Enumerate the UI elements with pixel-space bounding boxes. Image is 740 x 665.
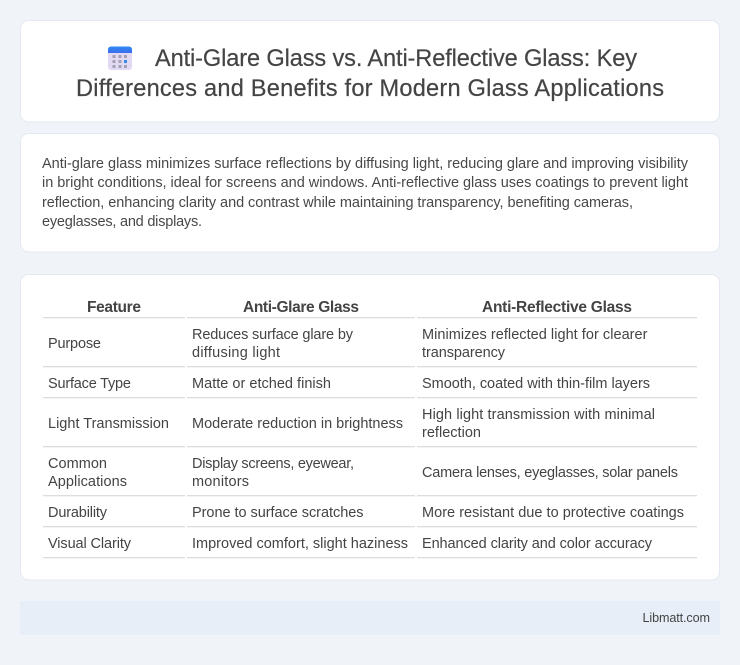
- table header row: Anti-Reflective Glass: [482, 299, 632, 316]
- row: surface type: [48, 376, 650, 392]
- row: purpose: Reduces surface glare by: [192, 327, 354, 343]
- row: purpose: Minimizes reflected light for clearer: [422, 327, 648, 343]
- text block: introduction paragraph: in bright conditions, ideal for screens and windows. Anti-reflective glass uses coatings to prevent light: [42, 175, 688, 191]
- footer credit: Libmatt.com: [642, 611, 710, 625]
- row: surface type: Matte or etched finish: [192, 376, 331, 392]
- row: common applications: Display screens, eyewear,: [192, 456, 354, 472]
- icon: calendar: [108, 46, 132, 70]
- row: light transmission: reflection: [422, 425, 481, 441]
- text block: introduction paragraph: Anti-glare glass minimizes surface reflections by diffusing light, reducing glare and improving visibility: [42, 156, 689, 172]
- row: common applications: [48, 456, 678, 490]
- row: common applications: Camera lenses, eyeglasses, solar panels: [422, 465, 678, 481]
- panel: comparison table: [20, 274, 720, 580]
- panel: introduction: [20, 134, 720, 252]
- row: light transmission: Light Transmission: [48, 416, 169, 432]
- row: purpose: Purpose: [48, 336, 101, 352]
- row: durability: [48, 505, 684, 521]
- table header row: Anti-Glare Glass: [243, 299, 359, 316]
- row: visual clarity: [48, 536, 653, 552]
- heading: title: [76, 46, 664, 102]
- row: common applications: Common: [48, 456, 107, 472]
- row: purpose: [48, 327, 648, 361]
- row: light transmission: Moderate reduction in brightness: [192, 416, 403, 432]
- row: surface type: Smooth, coated with thin-film layers: [422, 376, 650, 392]
- row: purpose: diffusing light: [192, 345, 280, 361]
- heading: title: Differences and Benefits for Modern Glass Applications: [76, 76, 664, 102]
- footer: [20, 601, 720, 635]
- row: common applications: Applications: [48, 474, 127, 490]
- table header row: Feature: [87, 299, 141, 316]
- row: visual clarity: Improved comfort, slight haziness: [192, 536, 408, 552]
- row: durability: Durability: [48, 505, 108, 521]
- text block: introduction paragraph: [42, 156, 689, 230]
- row: durability: More resistant due to protective coatings: [422, 505, 684, 521]
- row: purpose: transparency: [422, 345, 506, 361]
- row: visual clarity: Visual Clarity: [48, 536, 132, 552]
- table header row: [87, 299, 632, 316]
- row: surface type: Surface Type: [48, 376, 131, 392]
- heading: title: Anti-Glare Glass vs. Anti-Reflective Glass: Key: [155, 46, 637, 72]
- row: durability: Prone to surface scratches: [192, 505, 364, 521]
- text block: introduction paragraph: eyeglasses, and displays.: [42, 214, 202, 230]
- panel: title header: [20, 20, 720, 122]
- row: common applications: monitors: [192, 474, 249, 490]
- row: light transmission: [48, 407, 655, 441]
- text block: introduction paragraph: reflection, enhancing clarity and contrast while maintaining transparency, benefiting cameras,: [42, 195, 633, 211]
- row: light transmission: High light transmission with minimal: [422, 407, 655, 423]
- row: visual clarity: Enhanced clarity and color accuracy: [422, 536, 653, 552]
